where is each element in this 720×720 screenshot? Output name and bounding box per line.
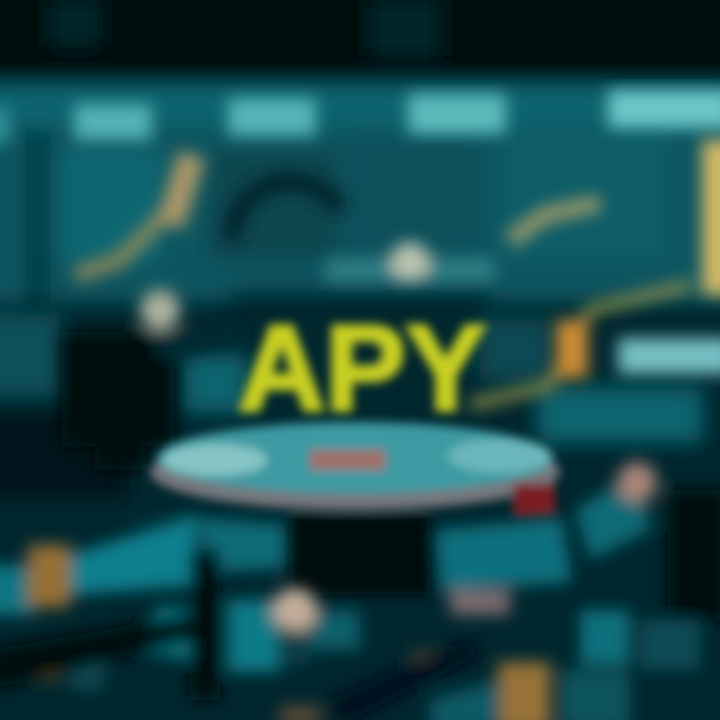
- lower room panels: [0, 462, 720, 720]
- ceiling lights: [0, 90, 720, 144]
- left seated figure: [62, 290, 240, 470]
- dark arc and wall charts: [75, 140, 720, 405]
- APY heading: APY: [238, 300, 486, 436]
- central table: [150, 422, 560, 595]
